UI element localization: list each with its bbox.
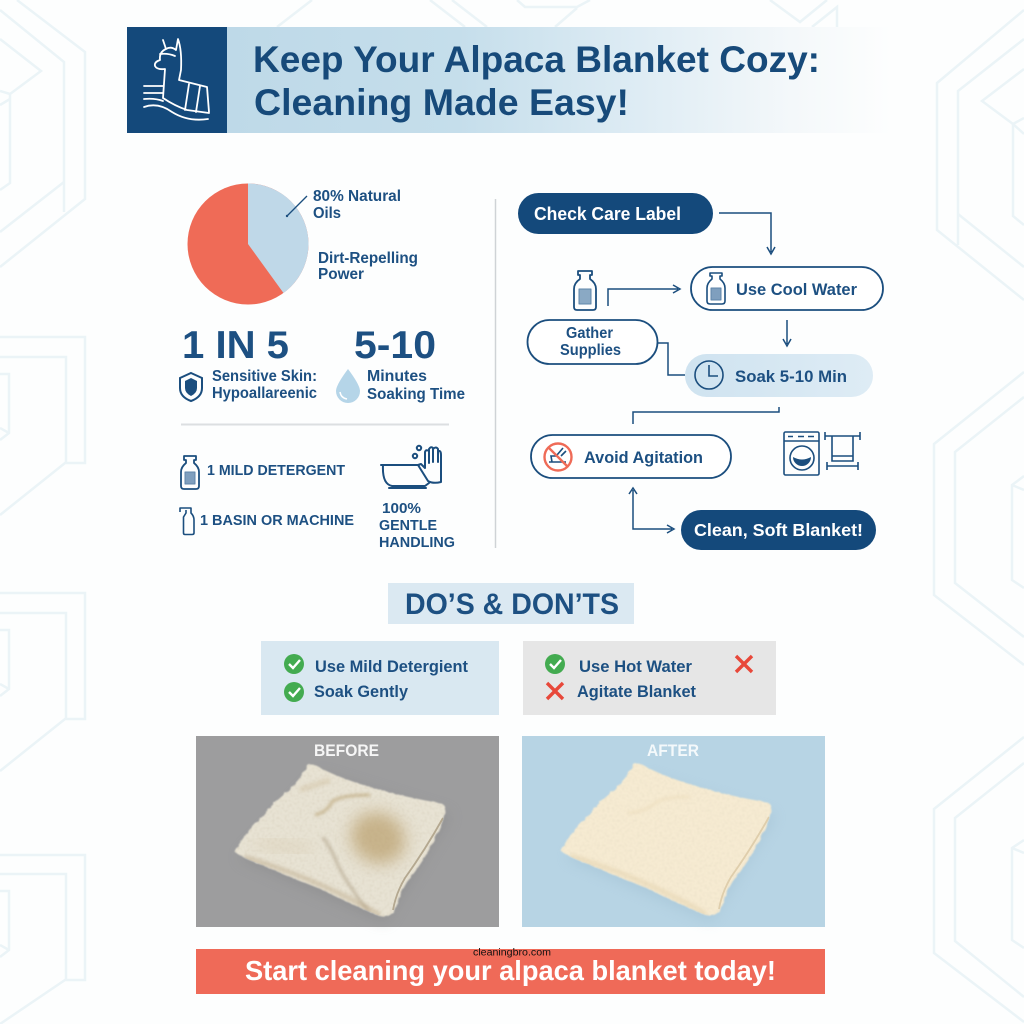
step: use cool water <box>691 267 883 310</box>
icon: detergent bottle <box>181 456 199 489</box>
icon: check <box>545 654 565 674</box>
gentle handling: HANDLING <box>379 535 455 551</box>
watermark: cleaningbro.com <box>473 948 551 958</box>
step: soak: Soak 5-10 Min <box>735 367 847 386</box>
gentle handling: GENTLE <box>379 518 437 534</box>
blanket: stained <box>230 760 450 920</box>
icon: cross <box>547 683 563 699</box>
icon: check <box>284 654 304 674</box>
icon: cross <box>736 656 752 672</box>
call to action banner <box>196 949 825 994</box>
step: soak <box>685 354 873 397</box>
pie label: natural oils: 80% Natural <box>313 188 401 205</box>
icon: alpaca <box>144 39 209 120</box>
icon: water drop <box>336 369 360 403</box>
supply: basin: 1 BASIN OR MACHINE <box>200 513 354 529</box>
arrow: supplies to water <box>608 285 680 306</box>
icon: basin and hand <box>381 446 441 488</box>
step: gather supplies <box>528 320 658 364</box>
arrow: agitation to blanket <box>629 488 674 533</box>
panel: don'ts: Agitate Blanket <box>577 683 696 701</box>
arrow: label to water <box>719 213 775 254</box>
connector: soak to agitation <box>633 407 779 424</box>
icon: shield <box>180 373 202 401</box>
panel: do's: Use Mild Detergient <box>315 658 468 676</box>
pie label: dirt repelling <box>318 250 418 283</box>
step: clean soft blanket: Clean, Soft Blanket! <box>694 520 863 540</box>
supply: detergent: 1 MILD DETERGENT <box>207 463 345 479</box>
stat: 1 in 5: 1 IN 5 <box>182 324 289 367</box>
arrow: water to soak <box>783 320 791 346</box>
icon: spray bottle <box>180 508 194 534</box>
step: avoid agitation: Avoid Agitation <box>584 448 703 467</box>
icon: washing machine <box>784 432 819 475</box>
panel: do's: Soak Gently <box>314 683 409 701</box>
call to action banner: Start cleaning your alpaca blanket today! <box>245 955 776 986</box>
gentle handling <box>379 446 455 551</box>
header icon panel <box>127 27 227 133</box>
supply: basin <box>180 508 354 534</box>
step: clean soft blanket <box>681 510 876 550</box>
panel: don'ts: Use Hot Water <box>579 658 693 676</box>
title <box>253 39 820 123</box>
panel: after photo <box>522 736 825 927</box>
flowchart <box>518 193 883 550</box>
icon: towel rack <box>825 432 860 470</box>
heading: do's and don'ts: DO’S & DON’TS <box>405 588 619 621</box>
step: avoid agitation <box>531 435 731 478</box>
stat: 1 in 5 <box>180 324 317 402</box>
step: check care label: Check Care Label <box>534 204 681 224</box>
gentle handling: 100% <box>382 501 421 517</box>
step: gather supplies: Supplies <box>560 342 621 359</box>
pie label: natural oils <box>313 188 401 222</box>
pie label: dirt repelling: Dirt-Repelling <box>318 250 418 267</box>
stat: 5-10 minutes <box>336 324 465 403</box>
panel: before photo <box>196 736 499 927</box>
stat: 1 in 5: Sensitive Skin: <box>212 368 317 385</box>
panel: after photo: AFTER <box>647 741 699 760</box>
supply: detergent <box>181 456 345 489</box>
stat: 5-10 minutes: Soaking Time <box>367 386 465 403</box>
header banner <box>127 27 892 133</box>
icon: check <box>284 682 304 702</box>
stat: 5-10 minutes: Minutes <box>367 368 427 385</box>
pie chart <box>188 184 309 304</box>
pie label: dirt repelling: Power <box>318 266 364 283</box>
step: check care label <box>518 193 713 234</box>
icon: bottle <box>574 271 596 310</box>
panel: before photo: BEFORE <box>314 741 379 760</box>
blanket: clean <box>555 760 775 920</box>
title: Cleaning Made Easy! <box>254 82 629 123</box>
pie label: natural oils: Oils <box>313 205 341 222</box>
stat: 5-10 minutes: 5-10 <box>354 324 436 367</box>
step: use cool water: Use Cool Water <box>736 280 857 299</box>
panel: do's <box>261 641 499 715</box>
panel: don'ts <box>523 641 776 715</box>
connector: supplies to soak <box>657 343 685 375</box>
title: Keep Your Alpaca Blanket Cozy: <box>253 39 820 80</box>
stat: 1 in 5: Hypoallareenic <box>212 385 317 402</box>
step: gather supplies: Gather <box>566 325 613 342</box>
header title background <box>226 27 892 133</box>
